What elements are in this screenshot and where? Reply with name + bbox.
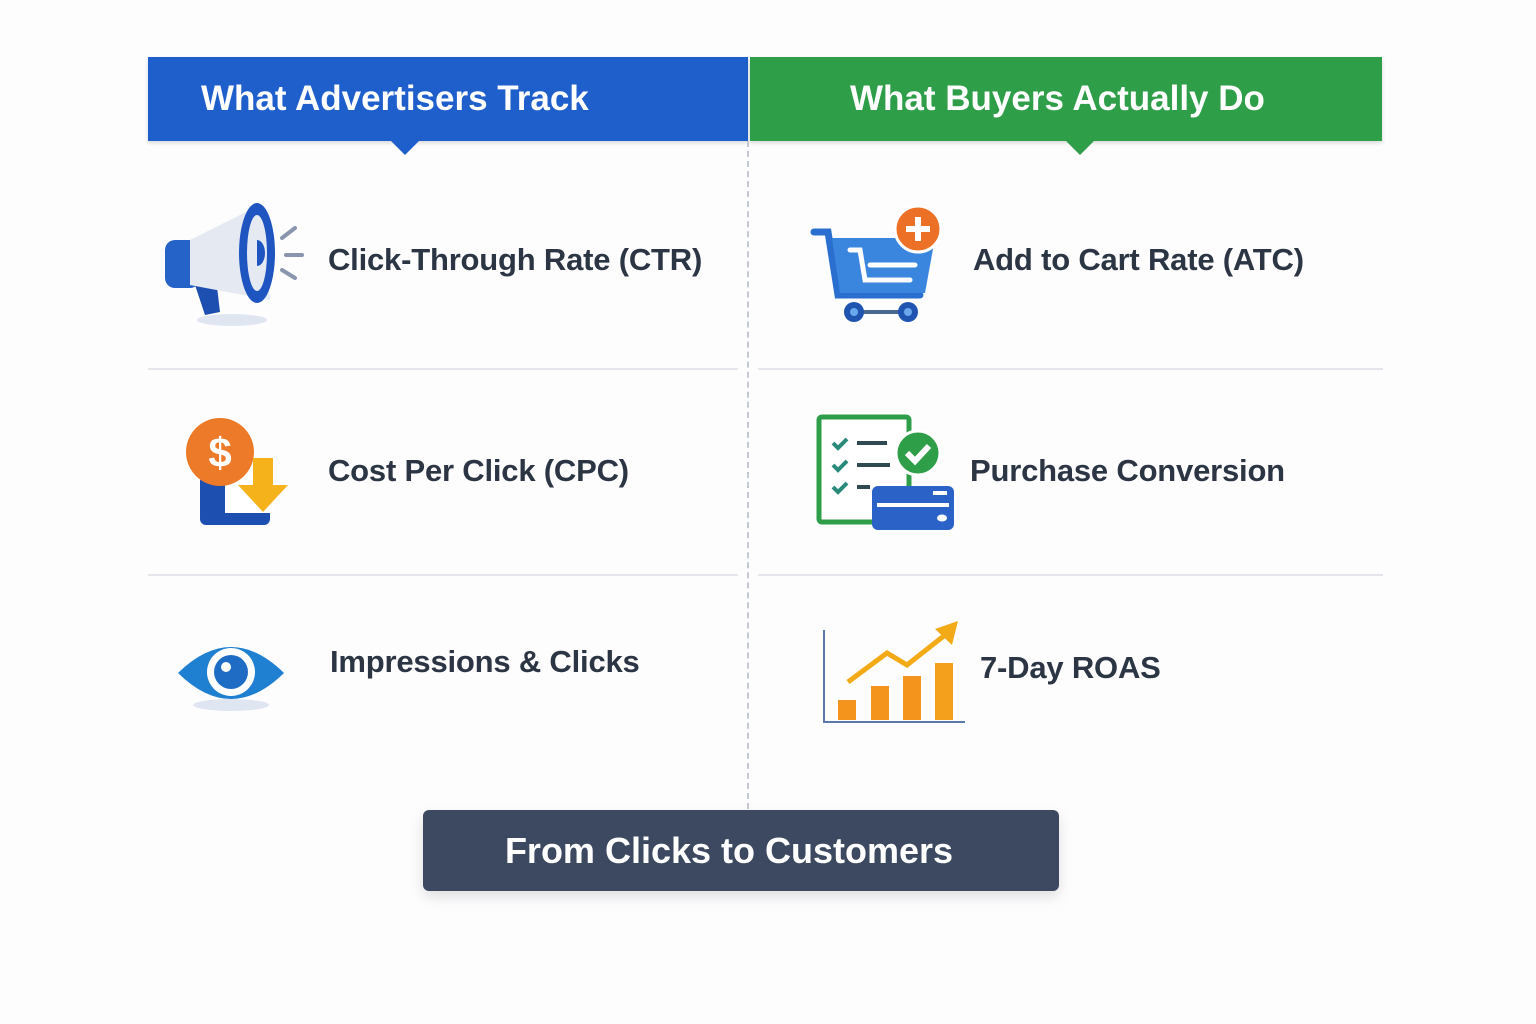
icon: purchase — [816, 414, 954, 530]
header: what advertisers track — [148, 57, 748, 141]
icon: cost per click — [186, 418, 288, 525]
icon: cost per click: $ — [208, 429, 232, 476]
text: cpc: Cost Per Click (CPC) — [328, 453, 629, 488]
text: atc: Add to Cart Rate (ATC) — [973, 242, 1304, 277]
header: what buyers actually do: What Buyers Actually Do — [850, 79, 1265, 118]
text: roas: 7-Day ROAS — [980, 650, 1161, 685]
text: purchase conversion: Purchase Conversion — [970, 453, 1285, 488]
icon: cart — [810, 208, 940, 322]
text: impressions: Impressions & Clicks — [330, 644, 640, 679]
banner: from clicks to customers: From Clicks to Customers — [505, 830, 953, 871]
header: what buyers actually do — [750, 57, 1382, 141]
header: what advertisers track: What Advertisers Track — [201, 79, 589, 118]
icon: megaphone — [165, 203, 304, 326]
icon: roas chart — [823, 621, 965, 723]
banner: from clicks to customers — [423, 810, 1059, 891]
icon: eye — [178, 647, 284, 711]
text: ctr: Click-Through Rate (CTR) — [328, 242, 702, 277]
